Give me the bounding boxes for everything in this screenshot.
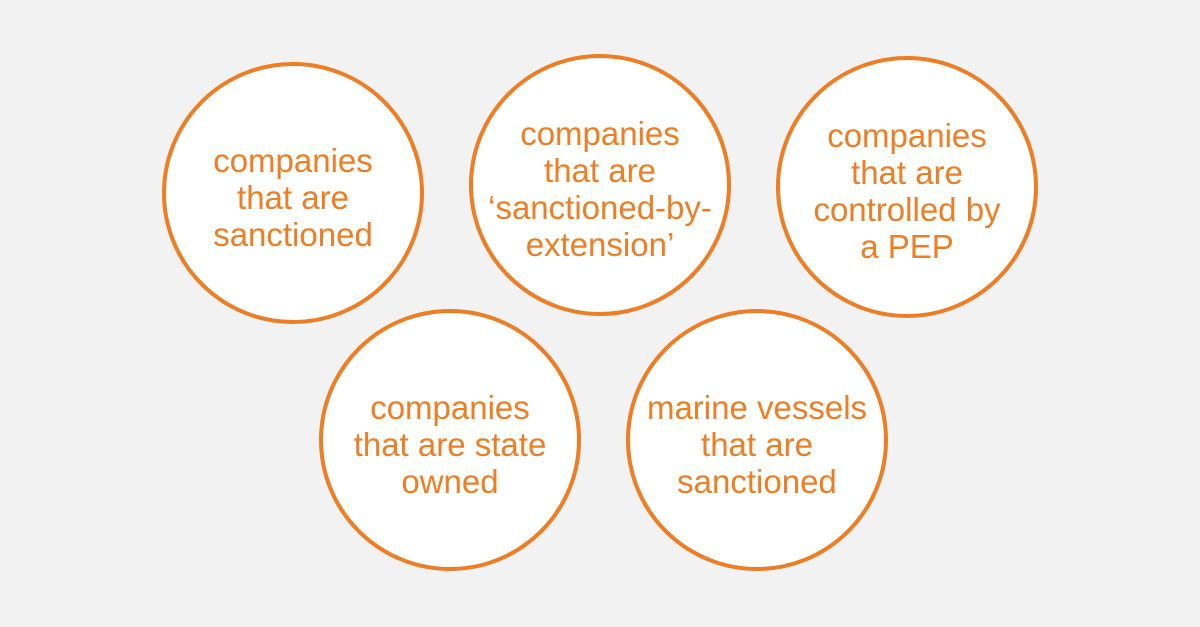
circle: companies that are sanctioned: companies (213, 142, 373, 178)
circle: state owned: owned (401, 462, 499, 500)
circle: sanctioned-by-extension: ‘sanctioned-by- (488, 189, 712, 226)
circle: companies that are sanctioned: sanctioned (213, 216, 373, 252)
circle: sanctioned-by-extension: companies (520, 115, 680, 152)
circle: marine vessels: sanctioned (677, 462, 837, 500)
circle: companies that are sanctioned: that are (237, 178, 349, 216)
circle: marine vessels: marine vessels (647, 388, 867, 426)
circle: controlled by a PEP: companies (827, 117, 987, 154)
circle: state owned: that are state (354, 426, 546, 462)
circle: controlled by a PEP (776, 56, 1038, 318)
circle: companies that are sanctioned (162, 62, 424, 324)
circle: sanctioned-by-extension (469, 54, 731, 316)
circle: controlled by a PEP: that are (851, 154, 963, 191)
circle: state owned (319, 309, 581, 571)
circle: sanctioned-by-extension: that are (544, 152, 656, 189)
circle: controlled by a PEP: controlled by (813, 191, 1001, 228)
circle: marine vessels: that are (701, 426, 813, 462)
circle: marine vessels (626, 309, 888, 571)
circle: state owned: companies (370, 388, 530, 426)
circle: controlled by a PEP: a PEP (860, 228, 954, 265)
circle: sanctioned-by-extension: extension’ (526, 226, 674, 263)
